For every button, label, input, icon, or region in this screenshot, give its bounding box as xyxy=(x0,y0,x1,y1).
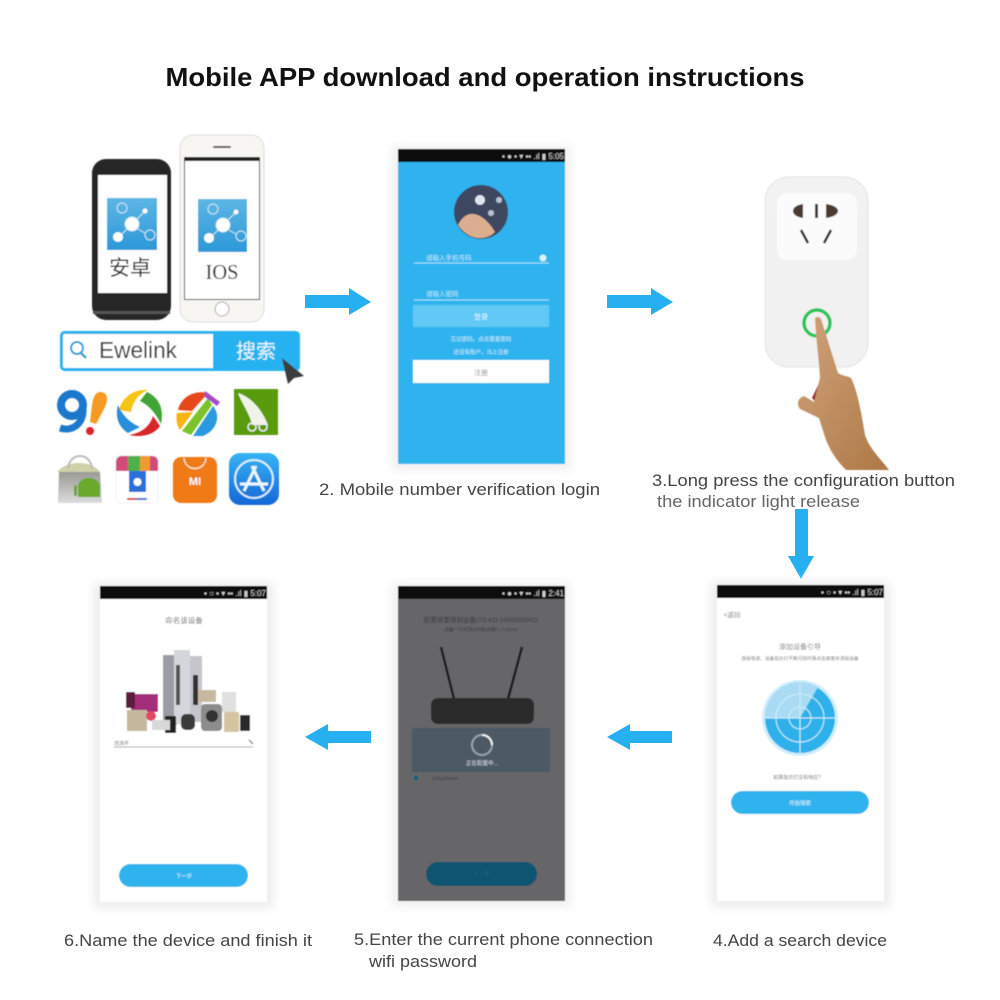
next button: 下一步 xyxy=(176,873,193,880)
screen text: 如果指示灯没有响应? xyxy=(773,774,821,781)
iphone: IOS xyxy=(206,260,238,284)
login form: 还没有账户，马上注册 xyxy=(453,348,509,356)
icon: mi store xyxy=(173,457,217,503)
icon: app store 3 xyxy=(176,391,220,436)
start button: 开始搜索 xyxy=(789,799,811,807)
panel: step 3 smart socket with finger xyxy=(765,177,889,470)
panel: step 5 wifi password phone xyxy=(392,583,571,907)
status bar xyxy=(398,586,565,599)
iphone xyxy=(180,135,264,322)
screen text: 添加设备引导 xyxy=(779,642,821,651)
caption: step 3 xyxy=(652,471,955,511)
title: Mobile APP download and operation instructions xyxy=(166,62,804,92)
caption: step 5: 5.Enter the current phone connection xyxy=(354,930,653,949)
wifi network row: ZDhu438806 xyxy=(432,776,459,781)
icon: mi store: MI xyxy=(189,476,201,488)
next button xyxy=(119,864,248,887)
caption: step 3: 3.Long press the configuration button xyxy=(652,471,955,490)
screen title: 命名该设备 xyxy=(165,615,203,625)
status bar: ▪ ● ▪ ▾ ▪▪ .ıl ▮ 5:05 xyxy=(502,152,565,161)
android phone xyxy=(92,159,171,320)
search bar: 搜索 xyxy=(236,340,276,363)
wifi network row xyxy=(414,776,459,781)
status bar xyxy=(717,585,884,598)
screen heading: 设备一只可用Wifi热点输入 2.4GHz xyxy=(444,626,518,633)
icon: app store xyxy=(229,453,279,505)
caption: step 2: 2. Mobile number verification login xyxy=(319,480,600,499)
status bar: ▪ ○ ▪ ▾ ▪▪ .ıl ▮ 5:07 xyxy=(204,589,267,598)
caption: step 5: wifi password xyxy=(368,952,477,971)
screen heading: 配置将要用到设备(TS-KD-1500083002) xyxy=(424,615,538,624)
screen text xyxy=(724,611,859,781)
login form: 登录 xyxy=(474,312,488,321)
screen text: 连接电源，设备指示灯不断闪烁时再点击搜索并添加设备 xyxy=(741,655,859,662)
green indicator ring xyxy=(804,310,830,336)
caption: step 4: 4.Add a search device xyxy=(713,931,887,950)
router xyxy=(431,647,534,724)
search bar: Ewelink xyxy=(99,337,177,363)
radar xyxy=(762,680,838,756)
socket body xyxy=(765,177,868,367)
caption: step 6: 6.Name the device and finish it xyxy=(64,931,312,950)
icon: app store 2 xyxy=(117,390,162,436)
start button xyxy=(731,791,869,814)
icon: cursor xyxy=(282,358,304,384)
search bar xyxy=(62,332,299,370)
appliances illustration xyxy=(126,650,250,733)
status bar xyxy=(100,586,267,599)
next button: 下一步 xyxy=(473,871,490,878)
icon: baidu store xyxy=(116,456,158,503)
login form: 请输入密码 xyxy=(426,289,459,298)
login form xyxy=(413,253,549,383)
login form: 注册 xyxy=(474,368,488,377)
socket face xyxy=(777,193,857,260)
device name input: 洗涤件 xyxy=(114,740,129,747)
status bar: ▪ ● ▪ ▾ ▪▪ .ıl ▮ 2:41 xyxy=(502,589,565,598)
icon: app store 4 xyxy=(234,389,278,435)
panel: step 1 download app xyxy=(57,135,304,505)
status bar: ▪ ○ ▪ ▾ ▪▪ .ıl ▮ 5:07 xyxy=(821,588,884,597)
caption: step 3: the indicator light release xyxy=(657,492,860,511)
arrow: step 4 to 5 xyxy=(607,724,672,750)
caption: step 5 xyxy=(354,930,653,971)
arrow: step 1 to 2 xyxy=(305,288,371,315)
progress overlay: 正在配置中... xyxy=(466,759,499,767)
next button xyxy=(426,862,537,886)
panel: step 2 login phone xyxy=(392,146,571,470)
android phone: 安卓 xyxy=(109,257,151,280)
status bar xyxy=(398,149,565,162)
icon: app store 1 xyxy=(60,392,107,435)
arrow: step 3 to 4 xyxy=(788,509,814,579)
panel: step 4 search device phone xyxy=(711,582,890,907)
arrow: step 2 to 3 xyxy=(607,288,673,315)
login form: 请输入手机号码 xyxy=(426,253,472,262)
icon: android market bag xyxy=(57,456,102,503)
screen text: <返回 xyxy=(724,611,740,619)
device name input xyxy=(114,740,253,748)
hand xyxy=(798,317,889,470)
progress overlay xyxy=(412,728,550,772)
panel: step 6 name device phone xyxy=(94,583,273,908)
avatar xyxy=(454,185,508,239)
screen heading xyxy=(424,615,538,633)
login form: 忘记密码，点击重置密码 xyxy=(451,335,512,343)
arrow: step 5 to 6 xyxy=(305,724,371,750)
